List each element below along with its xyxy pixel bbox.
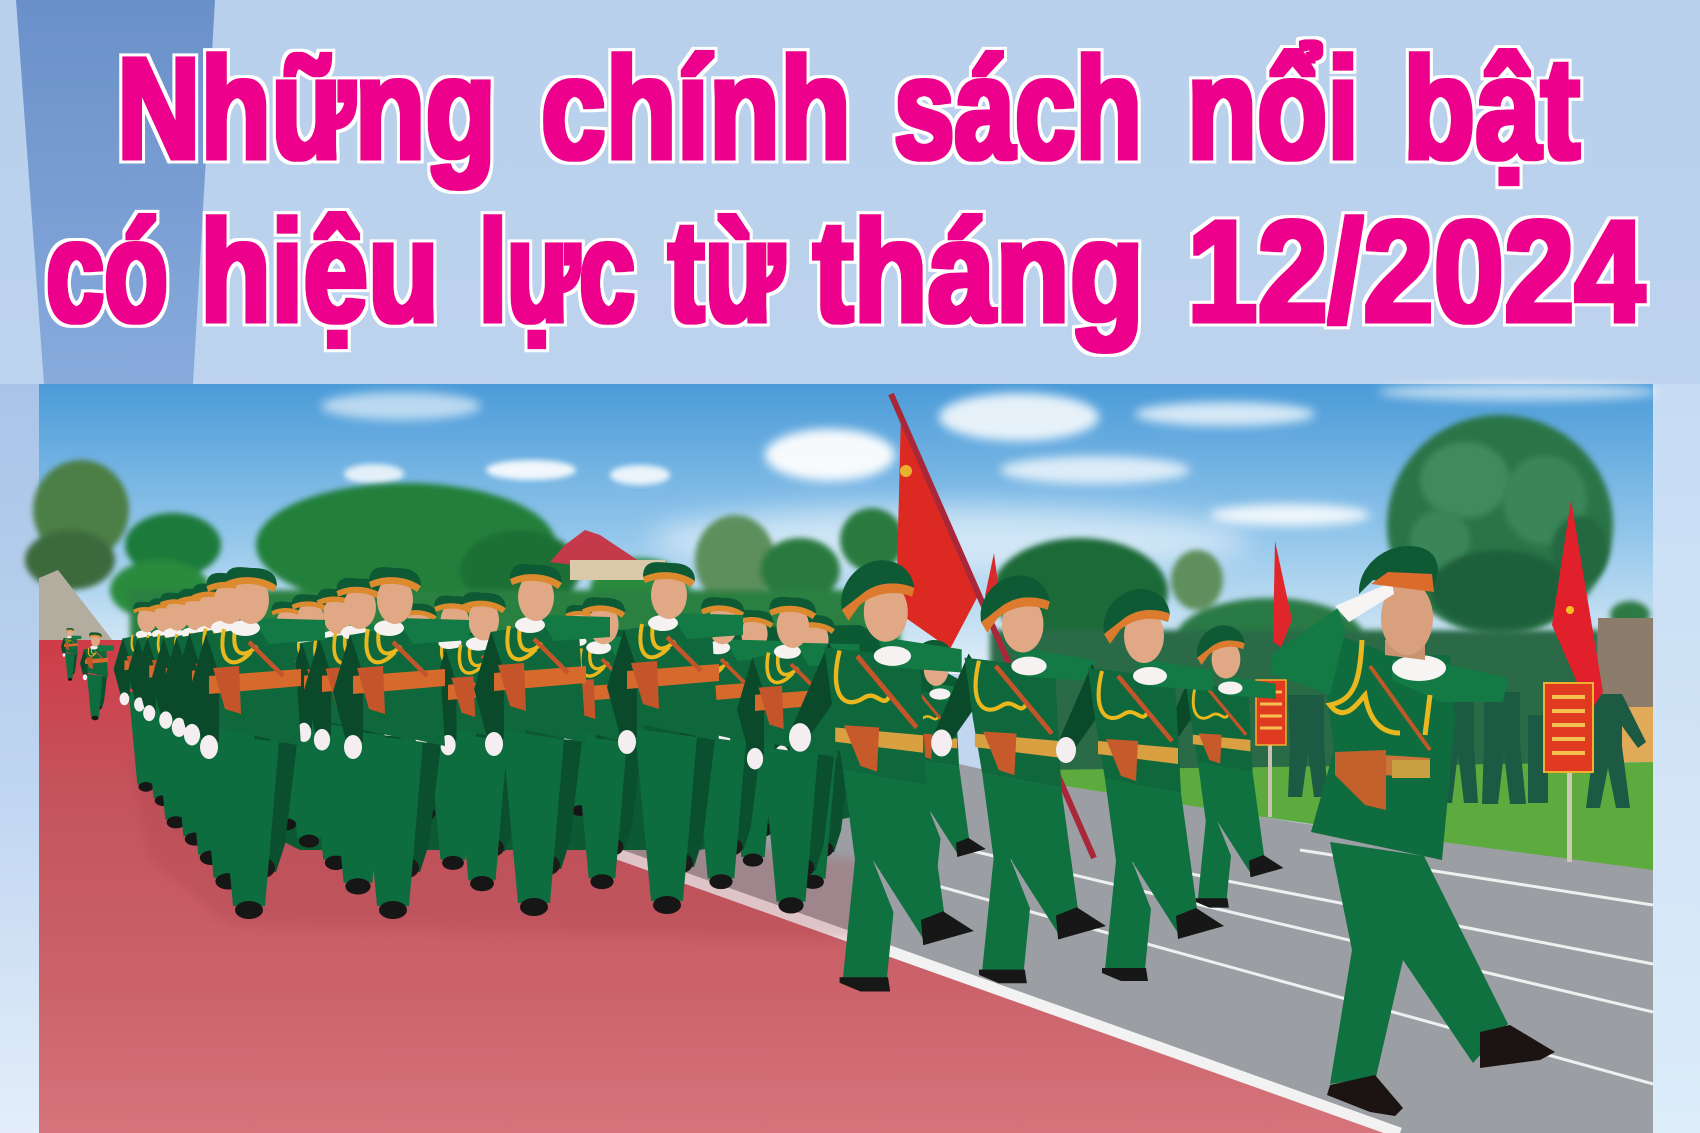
neck and collar xyxy=(1385,640,1425,660)
saluting arm xyxy=(1270,608,1345,695)
background troops at right xyxy=(1288,692,1646,808)
shadow under column xyxy=(130,760,860,940)
building at far right xyxy=(1598,618,1653,762)
holster xyxy=(1335,750,1386,810)
big tree at right xyxy=(1387,415,1613,635)
title line 2: lực xyxy=(479,191,635,352)
clouds xyxy=(321,383,1658,574)
face xyxy=(1381,581,1433,655)
far column of small soldiers xyxy=(61,628,114,720)
trousers xyxy=(1330,842,1508,1084)
title line 1: nổi xyxy=(1187,28,1359,189)
title line 2: có xyxy=(46,191,168,352)
background tree line xyxy=(25,460,1650,775)
saluting glove xyxy=(1335,582,1394,622)
leading officer saluting xyxy=(1270,546,1555,1116)
buckle xyxy=(1392,760,1430,778)
aiguillette cords xyxy=(1330,640,1430,735)
large red banner xyxy=(896,414,980,649)
right background strip xyxy=(1653,384,1700,1133)
photo: soldiers marching in parade xyxy=(25,383,1658,1133)
marching column: back ranks xyxy=(114,573,872,914)
title line 2: tháng xyxy=(813,191,1144,352)
cap xyxy=(1359,546,1438,594)
white track edge xyxy=(570,837,1400,1133)
red flag at far right xyxy=(1552,500,1603,712)
leather strap xyxy=(1370,666,1430,750)
title line 2: 12/2024 xyxy=(1187,191,1645,352)
cap band xyxy=(1371,572,1434,592)
title line 1: Những xyxy=(117,28,496,189)
sign board 1 xyxy=(1256,680,1286,817)
title line 2: từ xyxy=(668,191,785,352)
sign board 2 xyxy=(1544,683,1593,862)
left background strip xyxy=(0,384,39,1133)
flag pole xyxy=(891,394,1094,858)
soldier with arm across, left of flag bearer xyxy=(789,560,974,992)
jacket xyxy=(1311,635,1455,860)
crowd mass behind soldiers xyxy=(125,625,960,850)
red flag behind soldiers xyxy=(1273,541,1292,647)
red parade track xyxy=(39,640,1400,1133)
title xyxy=(46,28,1645,352)
sky xyxy=(39,384,1653,674)
belt xyxy=(1335,752,1430,778)
grass xyxy=(1040,762,1653,873)
title line 1: bật xyxy=(1403,28,1580,189)
concrete stand at left xyxy=(39,570,120,650)
soldier partly hidden behind the flag bearer xyxy=(882,640,986,883)
chest glove xyxy=(1392,655,1446,681)
title line 1: chính xyxy=(541,28,851,189)
right-side marchers xyxy=(931,576,1284,983)
title line 2 xyxy=(46,191,1645,352)
shoes xyxy=(1327,1025,1555,1116)
lane lines xyxy=(880,848,1653,1084)
title line 1 xyxy=(117,28,1580,189)
title line 2: hiệu xyxy=(200,191,439,352)
dark blue decorative band xyxy=(16,0,215,384)
marching column: front rank xyxy=(189,562,743,919)
right arm xyxy=(1392,660,1508,702)
small red flag middle xyxy=(985,553,1002,615)
title line 1: sách xyxy=(894,28,1142,189)
red-roofed building xyxy=(550,530,680,580)
track grey road xyxy=(400,640,1653,1133)
